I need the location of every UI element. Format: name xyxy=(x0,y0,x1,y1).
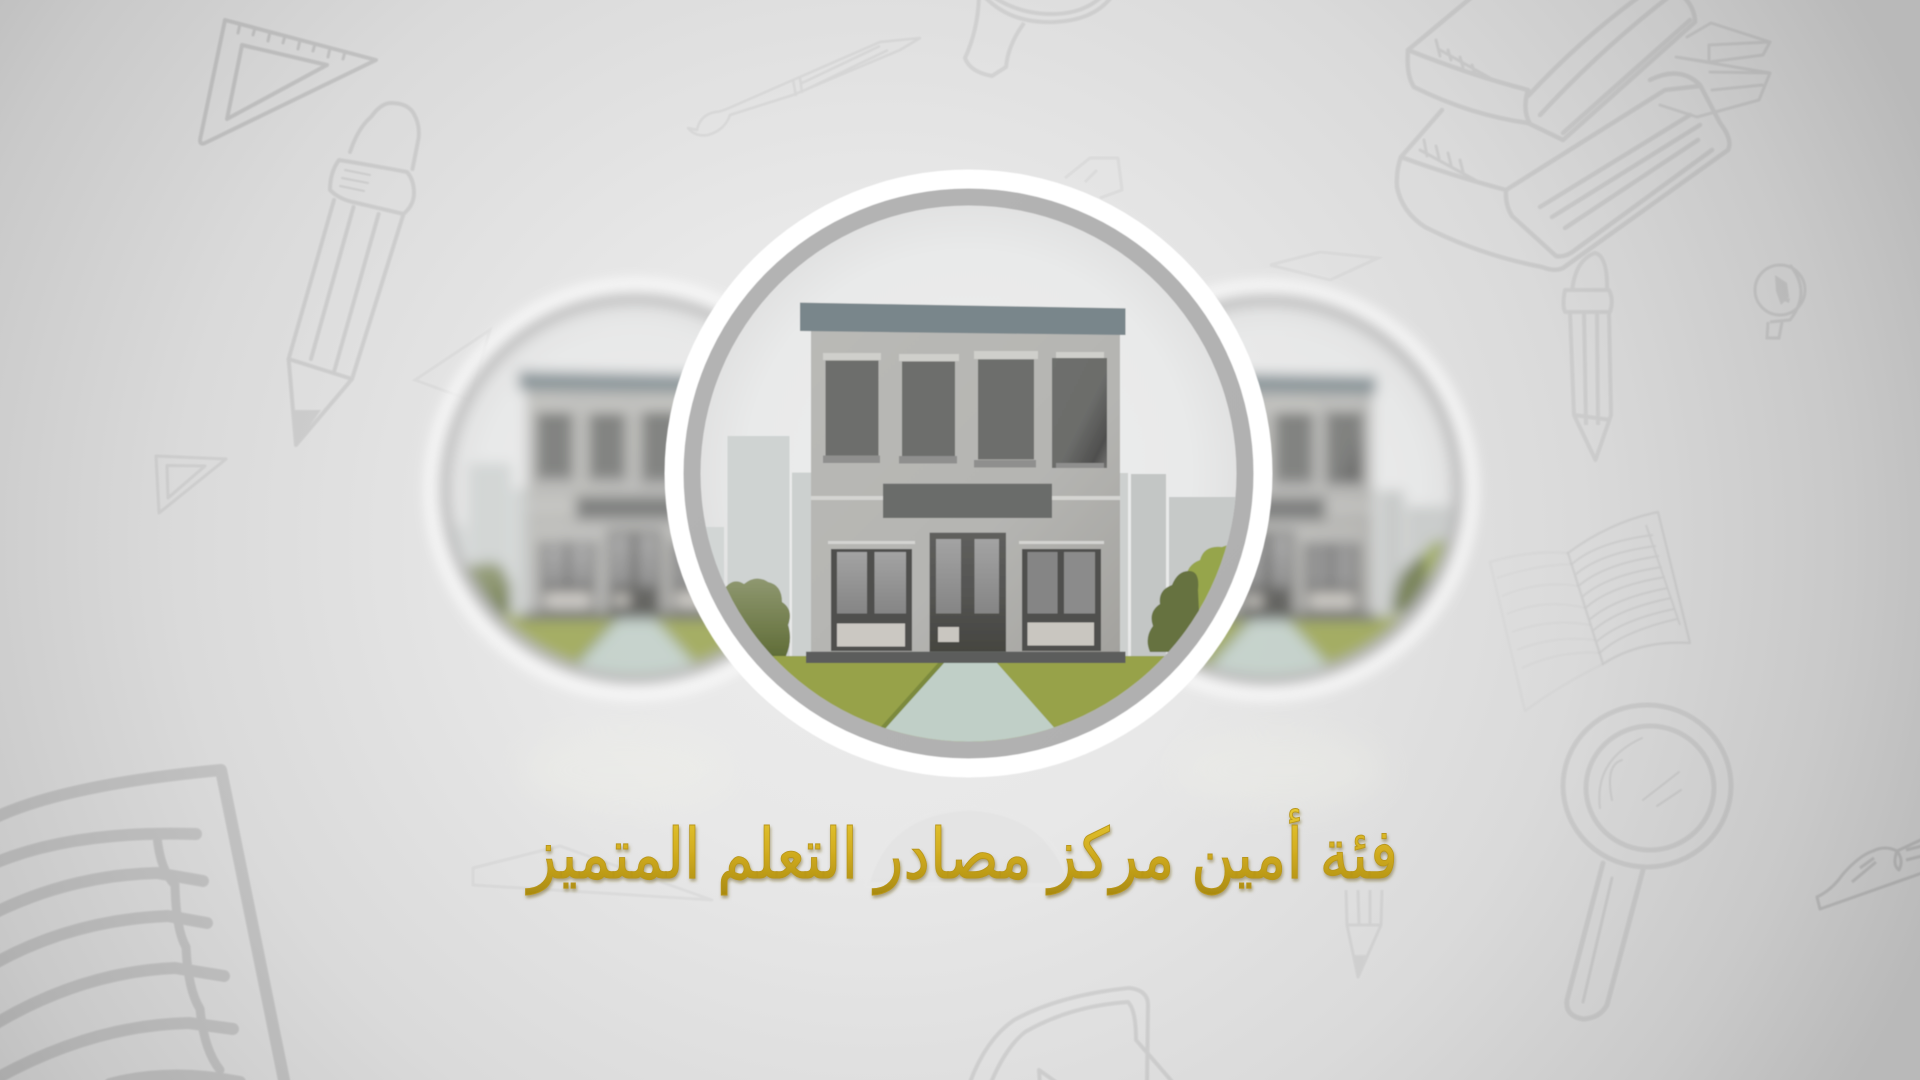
background doodle: notebook bottom left xyxy=(0,770,286,1080)
background doodle: open book right xyxy=(1490,512,1690,711)
background doodle: stacked books top right xyxy=(1397,0,1770,270)
background doodle: ruler behind title xyxy=(473,846,712,900)
background doodle: cap bottom centre xyxy=(969,988,1175,1080)
background doodle: small book right edge xyxy=(1817,838,1920,909)
background buildings xyxy=(695,436,1244,658)
lawn edge shadow xyxy=(878,663,944,730)
background doodle: faint book behind centre circle xyxy=(1065,158,1122,198)
path xyxy=(880,663,1058,760)
right light bush xyxy=(1180,544,1250,650)
blurred side medallion left xyxy=(425,279,845,714)
sign board xyxy=(883,484,1052,518)
centre medallion xyxy=(664,170,1272,800)
background doodle: set square top left xyxy=(200,20,376,144)
reflection: left circle xyxy=(520,730,730,810)
left page xyxy=(1490,552,1603,711)
disc backdrop xyxy=(700,206,1236,742)
floor divider xyxy=(811,496,1120,500)
title: فئة أمين مركز مصادر التعلم المتميز xyxy=(525,808,1398,895)
background doodle: faint cap behind left circle xyxy=(415,330,490,400)
white outer ring xyxy=(664,170,1272,778)
upper windows xyxy=(823,351,1107,468)
background doodle: top magnifier xyxy=(965,0,1112,76)
building base xyxy=(806,652,1126,663)
background doodle: pencil behind title xyxy=(1346,890,1382,977)
reflection: centre circle xyxy=(867,808,1071,885)
blurred side medallion right xyxy=(1058,280,1478,715)
left bush xyxy=(700,578,790,660)
door xyxy=(930,533,1006,652)
right shop window xyxy=(1019,541,1104,651)
school scene xyxy=(680,303,1260,800)
background doodle: large pencil left xyxy=(289,103,419,445)
reflection: right circle xyxy=(1175,730,1385,810)
building body xyxy=(811,331,1120,654)
background doodle: small globe xyxy=(1755,265,1805,338)
background doodle: pencil top right xyxy=(1564,253,1612,460)
right dark bush xyxy=(1148,571,1199,652)
lawn xyxy=(680,656,1260,800)
background doodle: magnifier right xyxy=(1563,705,1731,1019)
roof xyxy=(800,303,1126,335)
background doodle: small set square left xyxy=(156,456,226,513)
right page xyxy=(1568,512,1690,664)
grey inner ring xyxy=(684,188,1254,758)
left shop window xyxy=(828,541,915,651)
background doodle: faint cap right of centre xyxy=(1270,252,1378,280)
background doodle: paint brush xyxy=(688,38,920,135)
